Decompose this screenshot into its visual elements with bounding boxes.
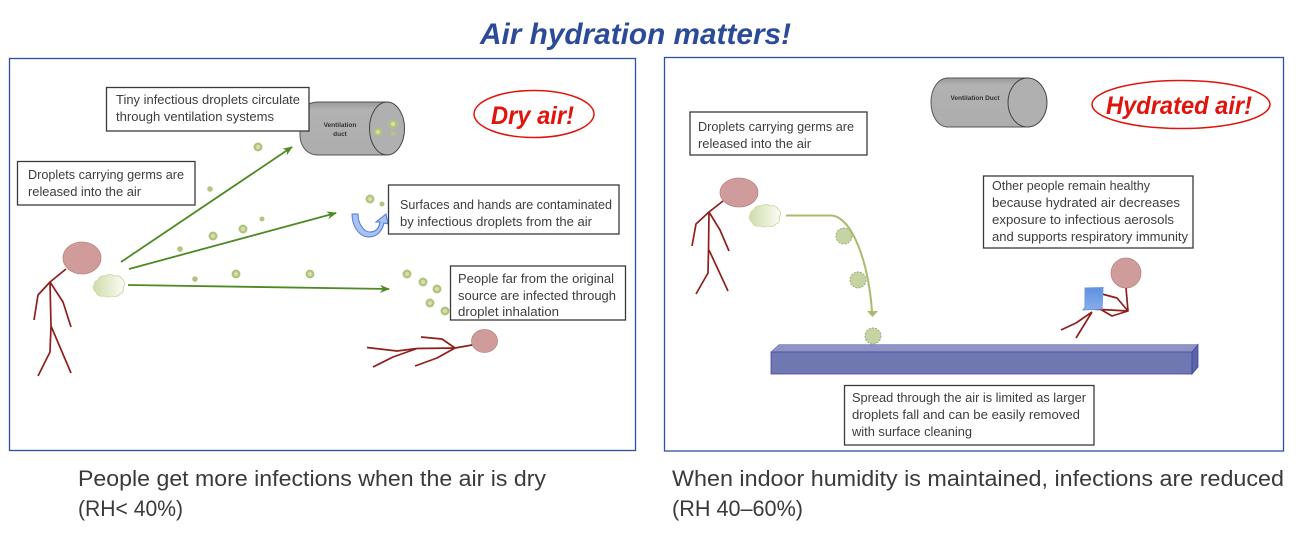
badge: dry air: Dry air! xyxy=(491,102,574,130)
title: Air hydration matters! xyxy=(479,18,791,51)
callout: droplets released: Droplets carrying germs are xyxy=(698,120,854,134)
badge: hydrated air xyxy=(1092,80,1270,128)
caption: dry air xyxy=(78,466,546,521)
callout: droplets released: released into the air xyxy=(698,137,811,151)
icon: ventilation duct xyxy=(300,102,404,155)
callout: other people remain healthy: and supports respiratory immunity xyxy=(992,230,1189,244)
figure: fallen person xyxy=(367,330,498,367)
callout: droplets released xyxy=(690,112,867,155)
caption: dry air: People get more infections when the air is dry xyxy=(78,466,546,491)
callout: ventilation xyxy=(106,88,309,131)
figure: seated healthy person with book xyxy=(1061,258,1141,338)
arrow: droplets falling xyxy=(786,216,878,317)
callout: people far from source xyxy=(450,266,626,320)
icon: ventilation duct xyxy=(931,78,1047,127)
icon: ventilation duct: duct xyxy=(333,131,348,138)
callout: ventilation: Tiny infectious droplets circulate xyxy=(116,93,300,107)
caption: hydrated air: (RH 40–60%) xyxy=(672,496,803,521)
icon: curved blue arrow xyxy=(352,214,388,237)
callout: people far from source: People far from the original xyxy=(458,272,614,286)
airborne droplets xyxy=(177,142,449,316)
arrow: to ventilation duct xyxy=(121,147,292,262)
figure: standing person with cloud xyxy=(34,242,125,376)
callout: droplets released: released into the air xyxy=(28,185,141,199)
callout: people far from source: droplet inhalation xyxy=(458,305,559,319)
callout: ventilation: through ventilation systems xyxy=(116,110,274,124)
callout: other people remain healthy: exposure to infectious aerosols xyxy=(992,213,1174,227)
callout: droplets released xyxy=(18,162,195,205)
caption: dry air: (RH< 40%) xyxy=(78,496,183,521)
callout: spread limited: with surface cleaning xyxy=(851,425,972,439)
callout: surfaces: Surfaces and hands are contaminated xyxy=(400,198,612,212)
icon: blue book xyxy=(1083,288,1103,310)
arrow: to surfaces xyxy=(129,213,336,269)
panel: dry air xyxy=(10,58,636,450)
badge: dry air xyxy=(474,90,594,138)
icon: ventilation duct: Ventilation Duct xyxy=(950,95,1000,102)
callout: spread limited: Spread through the air is limited as larger xyxy=(852,391,1086,405)
caption: hydrated air xyxy=(672,466,1284,521)
callout: people far from source: source are infected through xyxy=(458,289,616,303)
callout: other people remain healthy: because hydrated air decreases xyxy=(992,196,1180,210)
panel: hydrated air xyxy=(664,58,1284,451)
figure: standing person with cloud xyxy=(692,178,781,294)
surface: table xyxy=(771,344,1198,374)
badge: hydrated air: Hydrated air! xyxy=(1106,92,1252,120)
callout: other people remain healthy: Other people remain healthy xyxy=(992,179,1151,193)
callout: droplets released: Droplets carrying germs are xyxy=(28,168,184,182)
falling droplets xyxy=(836,228,881,344)
callout: spread limited: droplets fall and can be easily removed xyxy=(852,408,1080,422)
arrow: to distant person xyxy=(128,285,389,289)
callout: surfaces: by infectious droplets from the air xyxy=(400,215,592,229)
callout: other people remain healthy xyxy=(984,176,1193,248)
callout: surfaces xyxy=(388,185,619,234)
callout: spread limited xyxy=(844,386,1094,445)
caption: hydrated air: When indoor humidity is maintained, infections are reduced xyxy=(672,466,1284,491)
icon: ventilation duct: Ventilation xyxy=(324,122,356,129)
